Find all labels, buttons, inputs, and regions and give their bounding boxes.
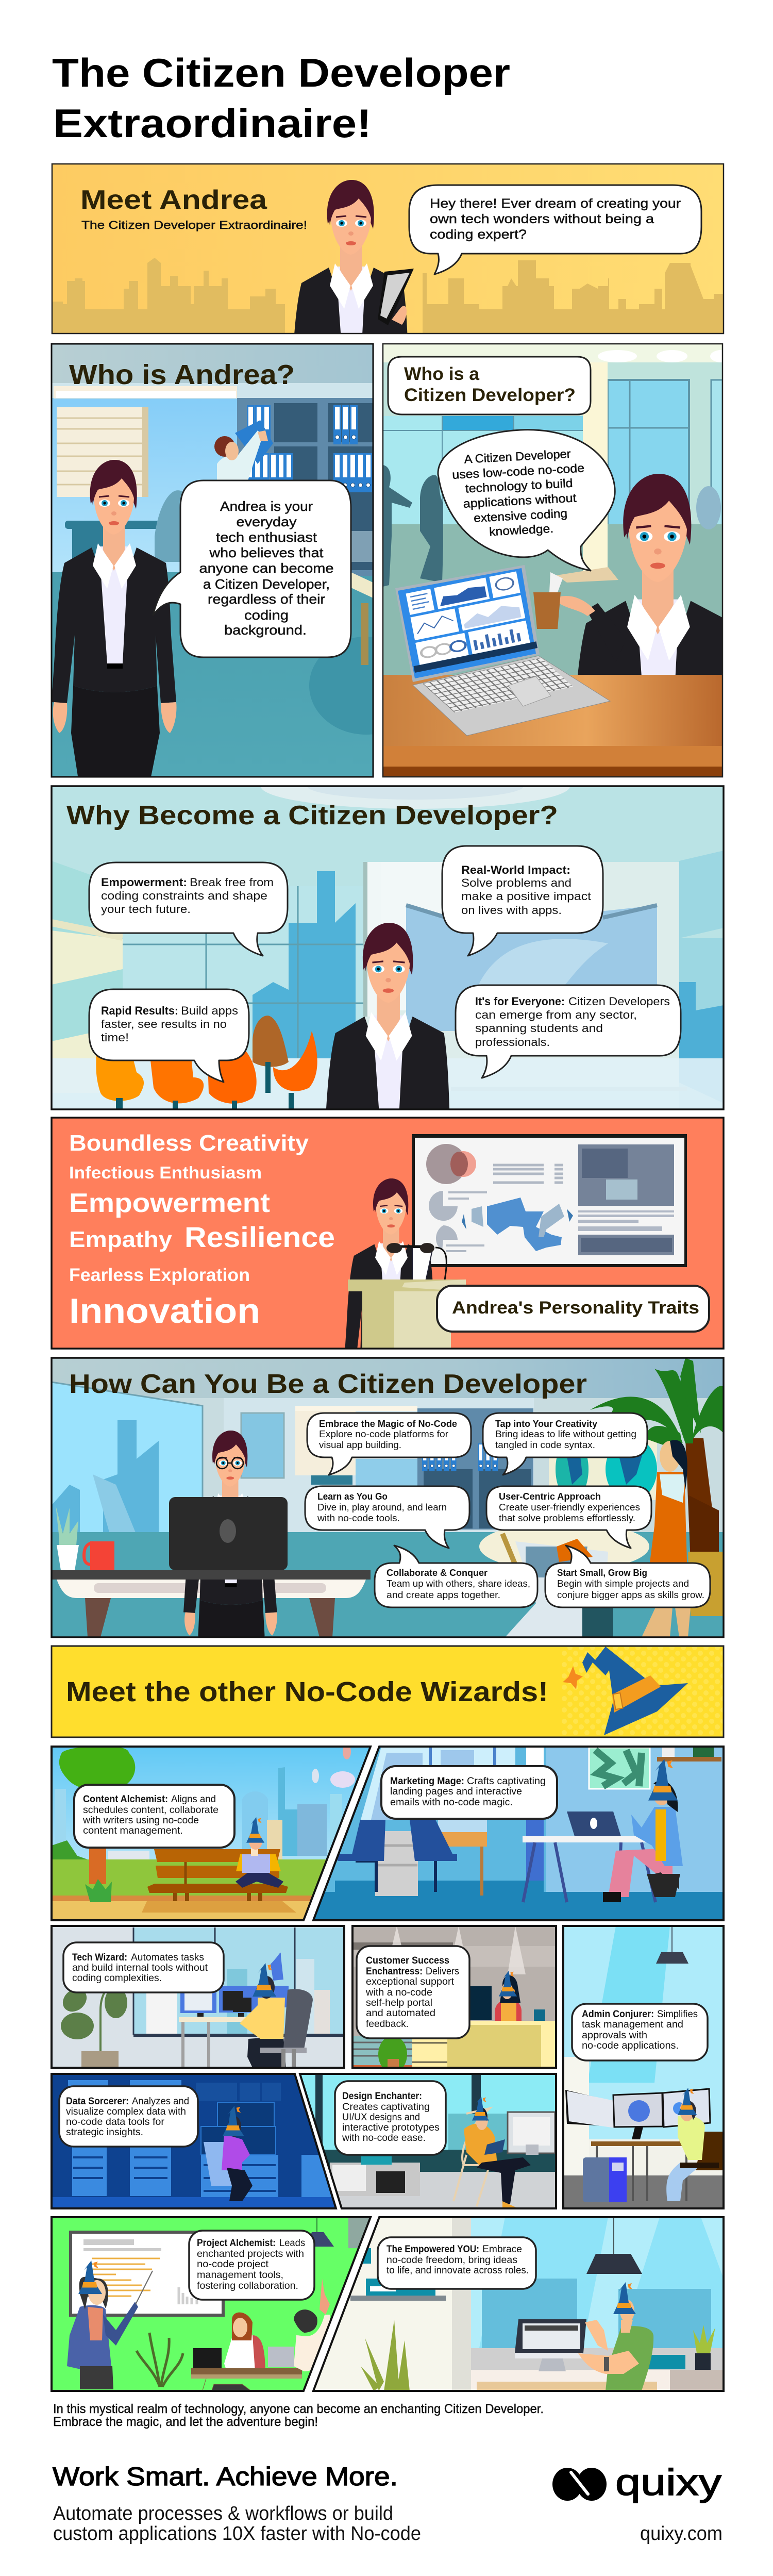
speech bubble: project alchemist: enchanted projects with	[197, 2249, 304, 2259]
speech bubble: design enchanter: UI/UX designs and	[342, 2112, 420, 2123]
speech bubble: customer success: Enchantress:	[366, 1966, 423, 1977]
footer description	[53, 2503, 421, 2545]
woman in orange dress	[642, 1440, 691, 1637]
triple monitors	[565, 2089, 710, 2139]
speech bubble: citizen developer definition: A Citizen Developer	[464, 447, 571, 466]
globe wall art	[549, 1437, 657, 1501]
speech bubble: customer success: with a no-code	[365, 1987, 432, 1998]
speech bubble: embrace the magic	[307, 1413, 471, 1475]
panel: marketing mage	[309, 1747, 724, 1920]
panel: project alchemist	[52, 2217, 371, 2392]
speech bubble: embrace the magic: Embrace the Magic of No-Code	[319, 1419, 457, 1429]
speech bubble: andrea description: everyday	[236, 514, 297, 529]
right table	[351, 572, 373, 598]
speech bubble: real-world impact	[442, 846, 603, 956]
speech bubble: learn as you go: Dive in, play around, and learn	[317, 1502, 447, 1513]
desk, cabinet and chairs	[338, 1820, 487, 1896]
speech bubble: content alchemist: Aligns and	[171, 1794, 216, 1805]
speech bubble: content alchemist	[74, 1785, 234, 1848]
icon: quixy chain mark	[552, 2468, 607, 2501]
speech bubble: empowerment: your tech future.	[101, 903, 191, 916]
speech bubble: tap into your creativity: Tap into Your Creativity	[495, 1419, 597, 1429]
label bubble: andrea's personality traits	[437, 1286, 709, 1332]
speech bubble: customer success: feedback.	[366, 2019, 409, 2030]
speech bubble: citizen developer definition: extensive coding	[474, 506, 568, 525]
data sorcerer at rack	[204, 2106, 253, 2201]
design enchanter with tablet	[453, 2097, 555, 2209]
speech bubble: project alchemist	[189, 2231, 314, 2300]
speech bubble: customer success: and automated	[366, 2008, 435, 2019]
speech bubble: project alchemist: Leads	[279, 2238, 305, 2249]
desk top	[52, 1570, 371, 1580]
character: Andrea with clipboard	[294, 180, 414, 333]
character: Andrea gesturing	[560, 474, 722, 675]
speech bubble: start small grow big: Begin with simple projects and	[557, 1578, 689, 1589]
character: Andrea presenting	[322, 923, 455, 1265]
speech bubble: customer success: exceptional support	[366, 1976, 455, 1987]
desk and monitors	[179, 1985, 289, 2068]
speech bubble: content alchemist: Content Alchemist:	[83, 1794, 168, 1805]
character: Andrea standing	[52, 460, 176, 779]
speech bubble: the empowered you: no-code freedom, bring ideas	[386, 2255, 517, 2266]
speech bubble: project alchemist: fostering collaboration.	[197, 2281, 298, 2291]
heading bubble: who is a citizen developer	[388, 357, 591, 414]
server racks	[68, 2080, 332, 2199]
speech bubble: the empowered you: to life, and innovate across roles.	[386, 2265, 529, 2276]
wizard on bench	[236, 1817, 283, 1888]
wall plant window and shelf	[589, 1747, 721, 1789]
speech bubble: tech wizard	[63, 1942, 224, 1992]
character: Andrea at podium	[344, 1178, 446, 1418]
speech bubble: it's for everyone: can emerge from any sector,	[475, 1008, 637, 1021]
label bubble: andrea's personality traits: Andrea's Personality Traits	[452, 1298, 699, 1318]
speech bubble: it's for everyone: spanning students and	[475, 1022, 603, 1035]
speech bubble: rapid results: Build apps	[181, 1004, 238, 1017]
personality trait words: Boundless Creativity	[69, 1131, 309, 1156]
filing cabinet	[237, 398, 373, 576]
window and city	[123, 871, 363, 1058]
closing text block: Embrace the magic, and let the adventure begin!	[53, 2415, 318, 2429]
heading: Meet the other No-Code Wizards!	[66, 1676, 548, 1707]
speech bubble: citizen developer definition: uses low-code no-code	[452, 461, 585, 481]
speech bubble: user-centric approach	[486, 1486, 651, 1548]
speech bubble: collaborate and conquer: and create apps together.	[386, 1590, 500, 1600]
speech bubble: marketing mage: emails with no-code magic.	[390, 1797, 513, 1808]
speech bubble: project alchemist: Project Alchemist:	[197, 2238, 276, 2249]
panel: the empowered you	[309, 2217, 724, 2391]
speech bubble: it's for everyone: It's for Everyone:	[475, 995, 565, 1008]
speech bubble: tap into your creativity: tangled in code syntax.	[495, 1440, 595, 1450]
round table and chair	[479, 1522, 649, 1637]
heading: why become: Why Become a Citizen Developer?	[66, 801, 558, 830]
speech bubble: admin conjurer: no-code applications.	[582, 2040, 679, 2051]
speech bubble: real-world impact: Real-World Impact:	[461, 863, 570, 876]
speech bubble: marketing mage	[381, 1766, 557, 1819]
speech bubble: it's for everyone: professionals.	[475, 1036, 550, 1049]
tech wizard at desk	[240, 1953, 313, 2068]
personality trait words: Innovation	[69, 1291, 260, 1331]
panel: customer success enchantress	[352, 1926, 556, 2073]
desk	[412, 2021, 556, 2068]
speech bubble: content alchemist: schedules content, collaborate	[83, 1805, 219, 1816]
panel: design enchanter	[299, 2074, 557, 2209]
panel: meet andrea	[52, 163, 725, 334]
panel: why become a citizen developer	[51, 785, 725, 1110]
speech bubble: customer success: self-help portal	[366, 1998, 432, 2008]
speech bubble: greeting	[409, 185, 701, 274]
speech bubble: embrace the magic: Explore no-code platforms for	[319, 1429, 448, 1439]
speech bubble: project alchemist: management tools,	[197, 2270, 283, 2281]
speech bubble: data sorcerer: Data Sorcerer:	[66, 2096, 129, 2107]
speech bubble: marketing mage: Marketing Mage:	[390, 1776, 464, 1787]
marketing mage at laptop	[523, 1759, 683, 1902]
speech bubble: tech wizard: Automates tasks	[131, 1952, 204, 1963]
desk	[591, 2141, 687, 2201]
speech bubble: empowerment: Empowerment:	[101, 876, 187, 889]
personality trait words	[69, 1131, 335, 1331]
desk	[383, 675, 722, 777]
background blinds and cabinet	[295, 1406, 533, 1531]
closing text block	[53, 2402, 544, 2429]
potted plant	[378, 2036, 407, 2073]
speech bubble: andrea description: who believes that	[209, 545, 324, 560]
right side wall	[679, 851, 724, 1109]
tree	[59, 1746, 135, 1902]
fern plant	[137, 2333, 183, 2387]
speech bubble: it's for everyone	[456, 985, 681, 1078]
coffee cup	[533, 592, 561, 629]
panel: who is a citizen developer	[382, 343, 724, 777]
speech bubble: data sorcerer	[59, 2086, 198, 2147]
window blinds	[54, 386, 237, 497]
speech bubble: project alchemist: no-code project	[197, 2259, 269, 2270]
speech bubble: andrea description: coding	[244, 607, 289, 623]
panel: data sorcerer	[52, 2074, 340, 2208]
laptop back	[169, 1497, 288, 1570]
heading: meet andrea: Meet Andrea	[80, 185, 267, 215]
closing text block: In this mystical realm of technology, anyone can become an enchanting Citizen Developer.	[53, 2402, 544, 2416]
speech bubble: data sorcerer: no-code data tools for	[66, 2117, 165, 2128]
icon: wizard hat	[563, 1647, 688, 1735]
speech bubble: rapid results	[89, 989, 249, 1082]
speech bubble: start small grow big: conjure bigger apps as skills grow.	[557, 1590, 704, 1600]
speech bubble: admin conjurer: Admin Conjurer:	[582, 2009, 654, 2020]
city skyline	[55, 1744, 355, 1866]
orange chairs	[96, 1016, 317, 1109]
colleague reaching for folder	[214, 420, 273, 482]
panel: admin conjurer	[563, 1926, 724, 2208]
speech bubble: rapid results: faster, see results in no	[101, 1018, 227, 1031]
panel: content alchemist	[52, 1744, 376, 1920]
speech bubble: user-centric approach: that solve problems effortlessly.	[499, 1513, 635, 1523]
speech bubble: andrea description: tech enthusiast	[216, 529, 317, 545]
panel: tech wizard	[52, 1926, 344, 2068]
side window	[52, 1382, 203, 1564]
title: The Citizen Developer	[52, 50, 510, 95]
speech bubble: content alchemist: content management.	[83, 1825, 183, 1836]
plant and binders on counter	[647, 2325, 715, 2370]
map	[487, 1198, 562, 1251]
title: Extraordinaire!	[53, 101, 372, 146]
speech bubble: andrea description: anyone can become	[199, 560, 334, 576]
speech bubble: andrea description	[153, 480, 351, 657]
heading bubble: who is a citizen developer: Citizen Developer?	[404, 385, 576, 405]
panel: meet the other no-code wizards	[52, 1646, 724, 1737]
speech bubble: learn as you go	[305, 1486, 469, 1548]
speech bubble: citizen developer definition: knowledge.	[489, 522, 554, 538]
speech bubble: the empowered you	[378, 2237, 536, 2289]
speech bubble: collaborate and conquer: Collaborate & Conquer	[386, 1568, 488, 1578]
heading: how can you be: How Can You Be a Citizen Developer	[69, 1369, 587, 1399]
presentation board	[412, 1134, 687, 1267]
speech bubble: greeting: own tech wonders without being a	[430, 212, 654, 226]
speech bubble: collaborate and conquer: Team up with others, share ideas,	[386, 1578, 530, 1589]
background chairs and desk	[65, 490, 182, 562]
seated team members	[191, 2279, 330, 2392]
speech bubble: greeting: Hey there! Ever dream of creating your	[430, 196, 681, 211]
hanging lamp	[656, 1926, 688, 1964]
personality trait words: Resilience	[184, 1221, 335, 1253]
speech bubble: tech wizard: Tech Wizard:	[72, 1952, 127, 1963]
speech bubble: collaborate and conquer	[375, 1545, 537, 1607]
presenter wizard	[67, 2261, 153, 2389]
speech bubble: marketing mage: Crafts captivating	[467, 1776, 546, 1787]
shelf unit	[330, 2156, 420, 2196]
panel: how can you be a citizen developer	[52, 1358, 724, 1670]
panel: who is andrea	[51, 343, 374, 777]
speech bubble: design enchanter	[335, 2081, 446, 2155]
speech bubble: marketing mage: landing pages and interactive	[390, 1786, 522, 1797]
speech bubble: start small grow big: Start Small, Grow Big	[557, 1568, 647, 1578]
speech bubble: greeting: coding expert?	[430, 227, 527, 242]
speech bubble: tap into your creativity	[483, 1413, 647, 1475]
pc tower	[583, 2157, 627, 2202]
speech bubble: admin conjurer	[572, 2004, 708, 2060]
silhouettes of colleagues	[383, 465, 443, 587]
heading bubble: who is a citizen developer: Who is a	[404, 364, 480, 384]
heading: who is andrea: Who is Andrea?	[69, 359, 295, 390]
footer description: Automate processes & workflows or build	[53, 2503, 393, 2524]
speech bubble: learn as you go: Learn as You Go	[317, 1491, 388, 1502]
park bench	[142, 1849, 296, 1913]
footer description: custom applications 10X faster with No-code	[53, 2523, 421, 2545]
podium	[348, 1279, 466, 1348]
speech bubble: customer success	[357, 1946, 469, 2038]
monitor	[515, 2319, 586, 2371]
palm tree in pot	[590, 1358, 724, 1616]
mug and plant	[56, 1505, 114, 1570]
speech bubble: the empowered you: The Empowered YOU:	[386, 2244, 479, 2255]
personality trait words: Empowerment	[69, 1188, 270, 1218]
column	[583, 362, 608, 575]
speech bubble: citizen developer definition: applications without	[463, 491, 577, 510]
speech bubble: tech wizard: coding complexities.	[72, 1973, 162, 1984]
office desk	[57, 1580, 366, 1637]
hanging lamp	[307, 2217, 334, 2247]
speech bubble: start small grow big	[545, 1545, 710, 1607]
speech bubble: rapid results: Rapid Results:	[101, 1004, 178, 1017]
empowered you figure	[578, 2282, 653, 2391]
personality trait words: Infectious Enthusiasm	[69, 1163, 262, 1182]
panel: personality traits	[52, 1118, 724, 1418]
speech bubble: the empowered you: Embrace	[482, 2244, 522, 2255]
subheading: The Citizen Developer Extraordinaire!	[81, 219, 307, 231]
speech bubble: admin conjurer: approvals with	[582, 2030, 647, 2041]
speech bubble: learn as you go: with no-code tools.	[317, 1513, 400, 1523]
laptop with dashboard	[395, 565, 610, 736]
speech bubble: user-centric approach: Create user-friendly experiences	[499, 1502, 640, 1513]
tall grass plant	[361, 2320, 410, 2391]
speech bubble: it's for everyone: Citizen Developers	[568, 995, 670, 1008]
speech bubble: real-world impact: make a positive impact	[461, 890, 591, 903]
speech bubble: rapid results: time!	[101, 1031, 129, 1044]
speech bubble: real-world impact: Solve problems and	[461, 876, 572, 889]
speech bubble: data sorcerer: Analyzes and	[132, 2096, 189, 2107]
speech bubble: citizen developer definition	[438, 430, 615, 571]
speech bubble: andrea description: background.	[224, 622, 307, 638]
speech bubble: empowerment: coding constraints and shape	[101, 889, 267, 902]
speech bubble: tap into your creativity: Bring ideas to life without getting	[495, 1429, 636, 1439]
personality trait words: Fearless Exploration	[69, 1265, 250, 1285]
personality trait words: Empathy	[69, 1227, 173, 1252]
speech bubble: tech wizard: and build internal tools without	[72, 1963, 208, 1973]
title	[52, 50, 510, 146]
speech bubble: data sorcerer: visualize complex data with	[66, 2106, 186, 2117]
speech bubble: embrace the magic: visual app building.	[319, 1440, 401, 1450]
speech bubble: content alchemist: with writers using no-code	[82, 1815, 199, 1826]
speech bubble: andrea description: Andrea is your	[220, 498, 313, 514]
presentation screen	[406, 905, 657, 1031]
speech bubble: empowerment: Break free from	[190, 876, 274, 889]
logo: quixy	[552, 2462, 721, 2503]
speech bubble: citizen developer definition: technology to build	[465, 476, 573, 495]
speech bubble: data sorcerer: strategic insights.	[66, 2127, 143, 2138]
speech bubble: design enchanter: Design Enchanter:	[342, 2091, 422, 2102]
potted plant	[58, 1984, 127, 2068]
shelf with folders	[350, 2248, 446, 2301]
speech bubble: design enchanter: Creates captivating	[342, 2102, 430, 2113]
speech bubble: customer success: Customer Success	[366, 1955, 449, 1966]
hanging lamp	[586, 2217, 642, 2274]
wordmark: quixy	[615, 2462, 721, 2503]
character: Andrea with glasses	[183, 1431, 277, 1670]
speech bubble: empowerment	[89, 862, 288, 956]
speech bubble: andrea description: regardless of their	[208, 591, 325, 607]
speech bubble: design enchanter: interactive prototypes	[342, 2122, 440, 2133]
admin conjurer figure	[666, 2088, 724, 2201]
speech bubble: user-centric approach: User-Centric Approach	[499, 1491, 601, 1502]
support agent with headset	[469, 1971, 545, 2021]
whiteboard	[69, 2231, 225, 2317]
speech bubble: customer success: Delivers	[426, 1966, 459, 1977]
speech bubble: admin conjurer: task management and	[582, 2019, 683, 2030]
speech bubble: design enchanter: with no-code ease.	[342, 2133, 426, 2143]
speech bubble: andrea description: a Citizen Developer,	[203, 576, 330, 592]
website link: quixy.com	[640, 2523, 722, 2545]
speech bubble: real-world impact: on lives with apps.	[461, 904, 562, 917]
footer tagline: Work Smart. Achieve More.	[53, 2462, 398, 2491]
speech bubble: admin conjurer: Simplifies	[657, 2009, 698, 2020]
